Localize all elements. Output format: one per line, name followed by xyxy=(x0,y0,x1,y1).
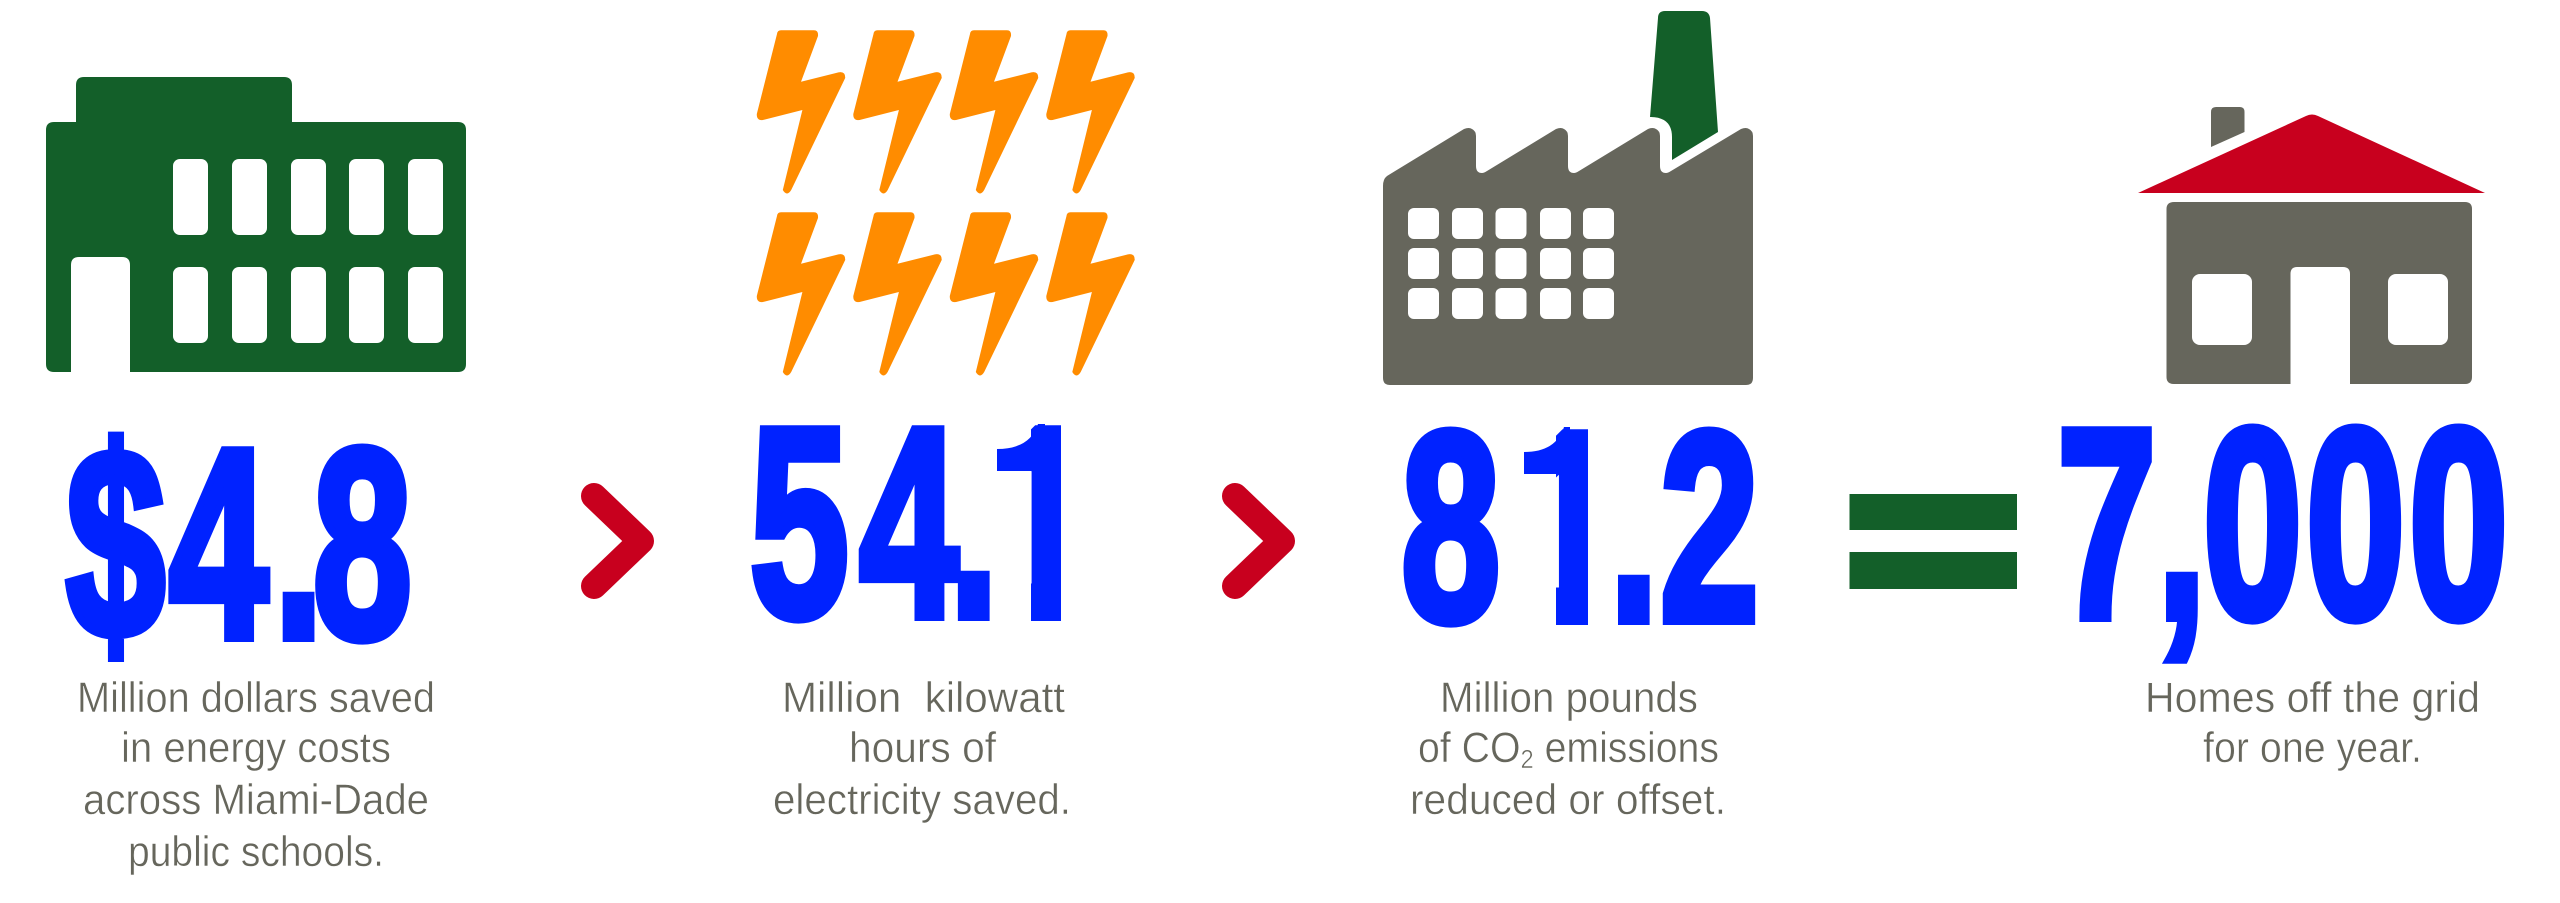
caption: dollars saved xyxy=(77,674,435,876)
caption: CO2 pounds: emissions xyxy=(1534,724,1719,772)
arrow: greater than 1 xyxy=(594,496,641,586)
caption: dollars saved: Million dollars saved xyxy=(77,674,435,722)
icon: house xyxy=(2138,107,2485,384)
caption: kilowatt hours: electricity saved. xyxy=(773,776,1071,824)
number: 81.2: 81.2 xyxy=(1401,377,1759,678)
caption: homes off the grid: Homes off the grid xyxy=(2145,674,2480,722)
number: 81.2 xyxy=(1404,426,1756,628)
caption: homes off the grid xyxy=(2145,674,2480,772)
number: $4.8: $4.8 xyxy=(66,394,412,695)
number: 54.1: 54.1 xyxy=(750,373,1092,674)
caption: dollars saved: in energy costs xyxy=(121,724,391,772)
icon: lightning bolts xyxy=(757,30,1135,376)
caption: CO2 pounds: 2 xyxy=(1520,744,1534,774)
icon: factory xyxy=(1383,11,1753,385)
caption: kilowatt hours: Million kilowatt xyxy=(782,674,1065,722)
number: 7,000: 7,000 xyxy=(2057,374,2508,675)
caption: CO2 pounds: of CO xyxy=(1418,724,1530,772)
caption: CO2 pounds xyxy=(1410,674,1726,824)
caption: kilowatt hours: hours of xyxy=(849,724,997,772)
caption: dollars saved: public schools. xyxy=(128,828,384,876)
caption: CO2 pounds: reduced or offset. xyxy=(1410,776,1726,824)
caption: CO2 pounds: Million pounds xyxy=(1440,674,1698,722)
icon: school building xyxy=(46,77,466,372)
number: 54.1 xyxy=(751,424,1061,624)
caption: kilowatt hours xyxy=(773,674,1071,824)
arrow: greater than 2 xyxy=(1235,496,1282,586)
caption: homes off the grid: for one year. xyxy=(2203,724,2422,772)
caption: dollars saved: across Miami-Dade xyxy=(83,776,429,824)
equals sign xyxy=(1850,494,2017,589)
